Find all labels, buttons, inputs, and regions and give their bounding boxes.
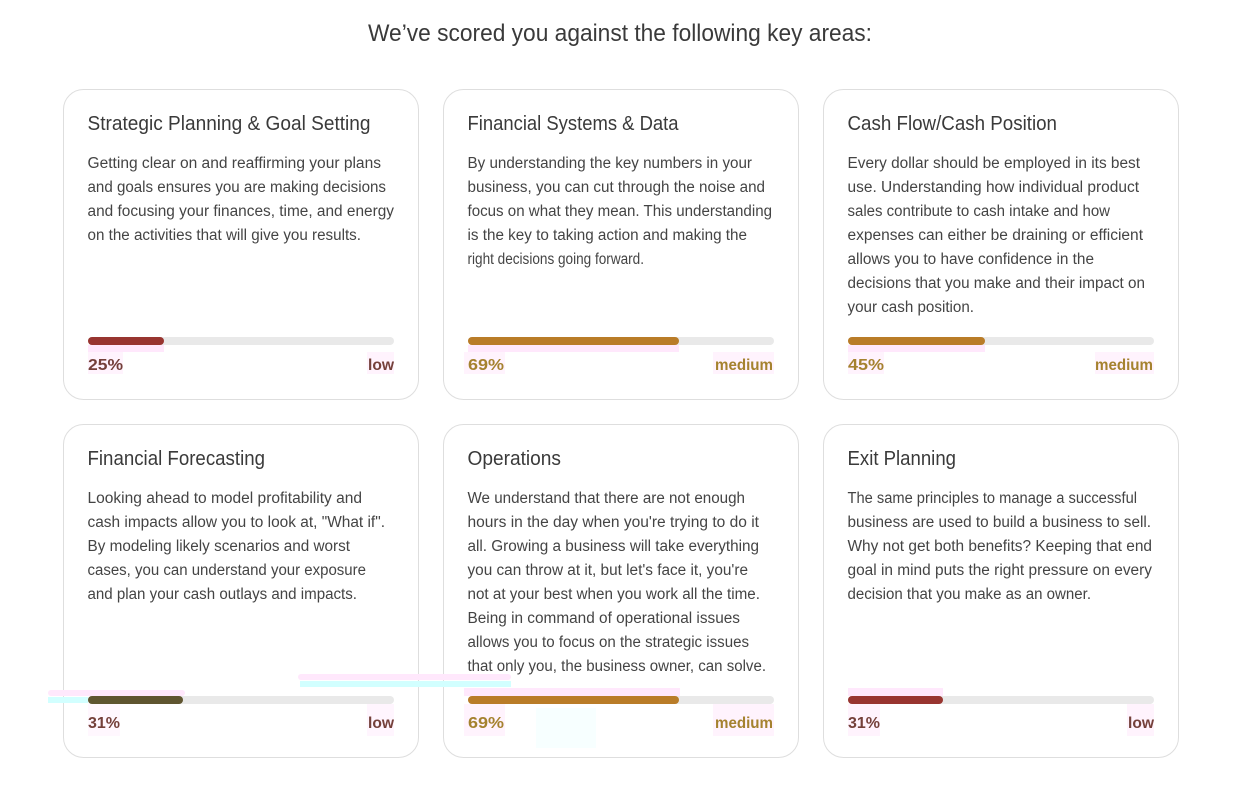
description: business are used to build a business to sell. [848,514,1151,531]
rating: low: low [368,715,395,732]
description: Being in command of operational issues [468,610,740,627]
rating: medium: medium [1095,357,1153,374]
description: and focusing your finances, time, and energy [88,203,394,220]
description [848,490,1152,603]
description: goal in mind puts the right pressure on every [848,562,1152,579]
score: 45%: 45% [848,357,884,374]
description: all. Growing a business will take everything [468,538,759,555]
description [468,490,766,675]
ghost bar artifact [298,674,511,687]
score: 25%: 25% [88,357,123,374]
score bar: 31% [848,696,1154,704]
rating: medium: medium [715,357,773,374]
description [88,490,385,603]
description: allows you to focus on the strategic issues [468,634,749,651]
panel: financial forecasting [48,424,418,758]
heading: Exit Planning [848,448,956,470]
description: not at your best when you work all the time. [468,586,760,603]
description: you can throw at it, but let's face it, you're [468,562,748,579]
score bar: 31% [48,690,394,704]
heading: Cash Flow/Cash Position [848,113,1057,135]
description: sales contribute to cash intake and how [848,203,1111,220]
description [468,155,772,268]
description: decision that you make as an owner. [848,586,1091,603]
panel: exit planning [824,424,1178,758]
description: right decisions going forward. [468,251,644,268]
description: The same principles to manage a successful [848,490,1137,507]
description: is the key to taking action and making the [468,227,747,244]
description: cases, you can understand your exposure [88,562,366,579]
panel: operations [444,424,798,758]
panel: financial systems and data [444,90,798,400]
panel: cash flow and cash position [824,90,1178,400]
heading: Strategic Planning & Goal Setting [88,113,370,135]
description: Every dollar should be employed in its best [848,155,1141,172]
description: By understanding the key numbers in your [468,155,752,172]
description: business, you can cut through the noise and [468,179,765,196]
rating: low: low [368,357,395,374]
description: allows you to have confidence in the [848,251,1094,268]
description: hours in the day when you're trying to do it [468,514,760,531]
description: focus on what they mean. This understanding [468,203,772,220]
description: and plan your cash outlays and impacts. [88,586,357,603]
rating: medium: medium [715,715,773,732]
score: 69%: 69% [468,715,504,732]
panel: strategic planning and goal setting [64,90,418,400]
score bar: 45% [848,337,1154,345]
description: Getting clear on and reaffirming your plans [88,155,381,172]
heading: Operations [468,448,561,470]
description: on the activities that will give you results. [88,227,361,244]
score: 31%: 31% [848,715,880,732]
description: decisions that you make and their impact on [848,275,1145,292]
description: use. Understanding how individual product [848,179,1140,196]
description: expenses can either be draining or efficient [848,227,1144,244]
title: We’ve scored you against the following key areas: [368,20,872,47]
description: Looking ahead to model profitability and [88,490,362,507]
description: cash impacts allow you to look at, "What if". [88,514,385,531]
description [88,155,394,244]
score bar: 25% [88,337,394,345]
score bar: 69% [468,696,774,704]
heading: Financial Systems & Data [468,113,679,135]
description: We understand that there are not enough [468,490,745,507]
rating: low: low [1128,715,1155,732]
score: 69%: 69% [468,357,504,374]
heading: Financial Forecasting [88,448,265,470]
score: 31%: 31% [88,715,120,732]
description: Why not get both benefits? Keeping that end [848,538,1152,555]
description: By modeling likely scenarios and worst [88,538,351,555]
description: and goals ensures you are making decisions [88,179,386,196]
description [848,155,1145,316]
description: that only you, the business owner, can solve. [468,658,766,675]
description: your cash position. [848,299,974,316]
score bar: 69% [468,337,774,345]
